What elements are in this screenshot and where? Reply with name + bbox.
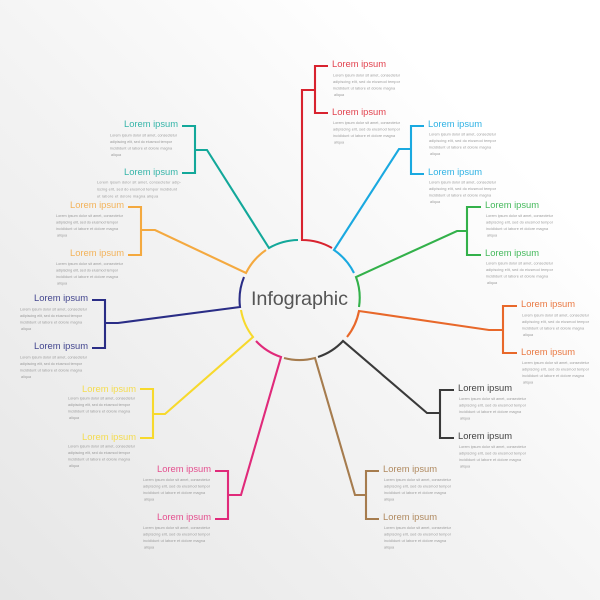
text block: amber bottom: Lorem ipsum dolor sit amet, consectetur [56,262,124,266]
text block: pink top [143,478,211,502]
text block: navy bottom: Lorem ipsum dolor sit amet, consectetur [20,356,88,360]
heading: amber bottom: Lorem ipsum [70,247,124,258]
text block: amber bottom: aliqua [57,282,68,286]
connector: green [356,207,481,307]
text block: blue top: incididunt ut labore et dolore magna [429,146,492,150]
text block: blue top: aliqua [430,152,441,156]
heading: black bottom: Lorem ipsum [458,430,512,441]
branch: blue [334,118,497,273]
connector: black [318,341,454,438]
text block: blue top [429,132,497,156]
branch: brown [284,358,452,550]
text block: pink top: aliqua [144,498,155,502]
heading: red top: Lorem ipsum [332,58,386,69]
text block: orange bottom: incididunt ut labore et dolore magna [522,374,585,378]
connector: blue [334,126,424,273]
text block: brown top: incididunt ut labore et dolore magna [384,491,447,495]
text block: brown bottom: Lorem ipsum dolor sit amet, consectetur [384,526,452,530]
text block: green top: Lorem ipsum dolor sit amet, consectetur [486,214,554,218]
text block: blue bottom: Lorem ipsum dolor sit amet, consectetur [429,180,497,184]
branch: black [318,341,527,468]
text block: red top: adipiscing elit, sed do eiusmod tempor [333,80,401,84]
title: Infographic [251,288,348,310]
text block: black top: incididunt ut labore et dolore magna [459,410,522,414]
text block: brown top: aliqua [384,498,395,502]
branch: red [302,58,401,248]
text block: amber top [56,214,124,238]
text block: green top: adipiscing elit, sed do eiusmod tempor [486,220,554,224]
heading: pink bottom: Lorem ipsum [157,511,211,522]
text block: orange bottom: Lorem ipsum dolor sit amet, consectetur [522,361,590,365]
heading: yellow top: Lorem ipsum [82,383,136,394]
text block: yellow top: incididunt ut labore et dolore magna [68,410,131,414]
branch: pink [143,341,281,550]
text block: orange bottom: aliqua [523,380,534,384]
text block: yellow bottom [68,444,136,468]
text block: black bottom: adipiscing elit, sed do eiusmod tempor [459,452,527,456]
heading: orange top: Lorem ipsum [521,298,575,309]
text block: teal bottom: Lorem ipsum dolor sit amet, consectetur adip- [97,180,182,184]
text block: amber top: Lorem ipsum dolor sit amet, consectetur [56,214,124,218]
text block: orange top: incididunt ut labore et dolore magna [522,326,585,330]
text block: red bottom: incididunt ut labore et dolore magna [333,134,396,138]
text block: brown bottom: aliqua [384,546,395,550]
text block: orange top: Lorem ipsum dolor sit amet, consectetur [522,314,590,318]
text block: yellow top: Lorem ipsum dolor sit amet, consectetur [68,396,136,400]
text block: black top: Lorem ipsum dolor sit amet, consectetur [459,397,527,401]
text block: brown bottom: incididunt ut labore et dolore magna [384,539,447,543]
text block: black bottom [459,445,527,468]
text block: yellow top [68,396,136,420]
text block: yellow bottom: adipiscing elit, sed do eiusmod tempor [68,451,131,455]
text block: orange top [522,314,590,337]
text block: teal bottom: ut labore et dolore magna aliqua [97,194,159,198]
heading: yellow bottom: Lorem ipsum [82,431,136,442]
connector: red [302,66,332,248]
text block: orange top: aliqua [523,333,534,337]
text block: navy bottom: adipiscing elit, sed do eiusmod tempor [20,362,83,366]
heading: navy bottom: Lorem ipsum [34,340,88,351]
text block: navy top: aliqua [21,327,32,331]
text block: orange top: adipiscing elit, sed do eiusmod tempor [522,320,590,324]
text block: navy top [20,308,88,331]
connector: teal [182,126,298,248]
text block: green top: incididunt ut labore et dolore magna [486,227,549,231]
text block: blue bottom: incididunt ut labore et dolore magna [429,194,492,198]
text block: red bottom: aliqua [334,140,345,144]
connector: pink [215,341,281,519]
heading: pink top: Lorem ipsum [157,463,211,474]
text block: navy top: adipiscing elit, sed do eiusmod tempor [20,314,83,318]
text block: red top: aliqua [334,93,345,97]
branch: amber [56,199,266,286]
text block: green top [486,214,554,238]
text block: brown bottom: adipiscing elit, sed do eiusmod tempor [384,532,452,536]
text block: black top: aliqua [460,416,471,420]
text block: green bottom: adipiscing elit, sed do eiusmod tempor [486,268,554,272]
text block: navy bottom: incididunt ut labore et dolore magna [20,368,83,372]
text block: blue bottom: adipiscing elit, sed do eiusmod tempor [429,187,497,191]
text block: amber top: aliqua [57,234,68,238]
heading: green top: Lorem ipsum [485,199,539,210]
text block: green bottom: Lorem ipsum dolor sit amet, consectetur [486,262,554,266]
text block: teal top: Lorem ipsum dolor sit amet, consectetur [110,134,178,138]
text block: navy bottom [20,356,88,379]
text block: amber bottom: adipiscing elit, sed do eiusmod tempor [56,268,119,272]
text block: teal top: adipiscing elit, sed do eiusmod tempor [110,140,173,144]
text block: pink bottom: aliqua [144,546,155,550]
text block: brown top: adipiscing elit, sed do eiusmod tempor [384,484,452,488]
text block: yellow top: adipiscing elit, sed do eiusmod tempor [68,403,131,407]
connector: orange [347,306,517,353]
text block: amber bottom: incididunt ut labore et dolore magna [56,275,119,279]
heading: amber top: Lorem ipsum [70,199,124,210]
text block: black bottom: Lorem ipsum dolor sit amet, consectetur [459,445,527,449]
text block: brown top [384,478,452,502]
text block: pink top: Lorem ipsum dolor sit amet, consectetur [143,478,211,482]
heading: blue bottom: Lorem ipsum [428,166,482,177]
heading: brown top: Lorem ipsum [383,463,437,474]
text block: blue bottom: aliqua [430,200,441,204]
branch: yellow [68,310,253,468]
text block: yellow bottom: aliqua [69,464,80,468]
text block: pink top: incididunt ut labore et dolore magna [143,491,206,495]
text block: green bottom [486,262,554,285]
text block: red top: Lorem ipsum dolor sit amet, consectetur [333,74,401,78]
heading: blue top: Lorem ipsum [428,118,482,129]
text block: red bottom: adipiscing elit, sed do eiusmod tempor [333,128,401,132]
text block: pink bottom: Lorem ipsum dolor sit amet, consectetur [143,526,211,530]
heading: brown bottom: Lorem ipsum [383,511,437,522]
connector: amber [128,207,266,273]
heading: green bottom: Lorem ipsum [485,247,539,258]
text block: pink bottom: adipiscing elit, sed do eiusmod tempor [143,532,211,536]
heading: teal top: Lorem ipsum [124,118,178,129]
text block: black top [459,397,527,420]
text block: green top: aliqua [487,234,498,238]
text block: orange bottom: adipiscing elit, sed do eiusmod tempor [522,368,590,372]
heading: orange bottom: Lorem ipsum [521,346,575,357]
text block: pink bottom: incididunt ut labore et dolore magna [143,539,206,543]
text block: blue bottom [429,180,497,204]
branch: orange [347,298,590,384]
text block: teal bottom [97,180,182,198]
text block: green bottom: aliqua [487,281,498,285]
connector: brown [284,358,379,519]
text block: brown bottom [384,526,452,550]
text block: teal top [110,134,178,157]
heading: red bottom: Lorem ipsum [332,106,386,117]
text block: amber bottom [56,262,124,286]
text block: blue top: Lorem ipsum dolor sit amet, consectetur [429,132,497,136]
connector: navy [92,277,244,348]
text block: black bottom: aliqua [460,464,471,468]
text block: teal top: aliqua [111,153,122,157]
text block: navy bottom: aliqua [21,375,32,379]
text block: red top: incididunt ut labore et dolore magna [333,86,396,90]
text block: black bottom: incididunt ut labore et dolore magna [459,458,522,462]
text block: brown top: Lorem ipsum dolor sit amet, consectetur [384,478,452,482]
text block: navy top: incididunt ut labore et dolore magna [20,320,83,324]
text block: navy top: Lorem ipsum dolor sit amet, consectetur [20,308,88,312]
text block: red top [333,74,401,97]
heading: black top: Lorem ipsum [458,382,512,393]
connector: yellow [140,310,253,438]
text block: yellow top: aliqua [69,416,80,420]
text block: pink bottom [143,526,211,550]
text block: amber top: adipiscing elit, sed do eiusmod tempor [56,220,119,224]
text block: red bottom [333,121,401,144]
heading: navy top: Lorem ipsum [34,292,88,303]
heading: teal bottom: Lorem ipsum [124,166,178,177]
text block: yellow bottom: Lorem ipsum dolor sit amet, consectetur [68,444,136,448]
text block: yellow bottom: incididunt ut labore et dolore magna [68,458,131,462]
text block: teal bottom: iscing elit, sed do eiusmod tempor incididunt [97,188,177,192]
text block: black top: adipiscing elit, sed do eiusmod tempor [459,404,527,408]
text block: teal top: incididunt ut labore et dolore magna [110,146,173,150]
branch: teal [97,118,298,248]
text block: green bottom: incididunt ut labore et dolore magna [486,274,549,278]
text block: amber top: incididunt ut labore et dolore magna [56,227,119,231]
text block: red bottom: Lorem ipsum dolor sit amet, consectetur [333,121,401,125]
branch: navy [20,277,244,379]
text block: pink top: adipiscing elit, sed do eiusmod tempor [143,484,211,488]
branch: green [356,199,554,307]
text block: blue top: adipiscing elit, sed do eiusmod tempor [429,139,497,143]
text block: orange bottom [522,361,590,384]
